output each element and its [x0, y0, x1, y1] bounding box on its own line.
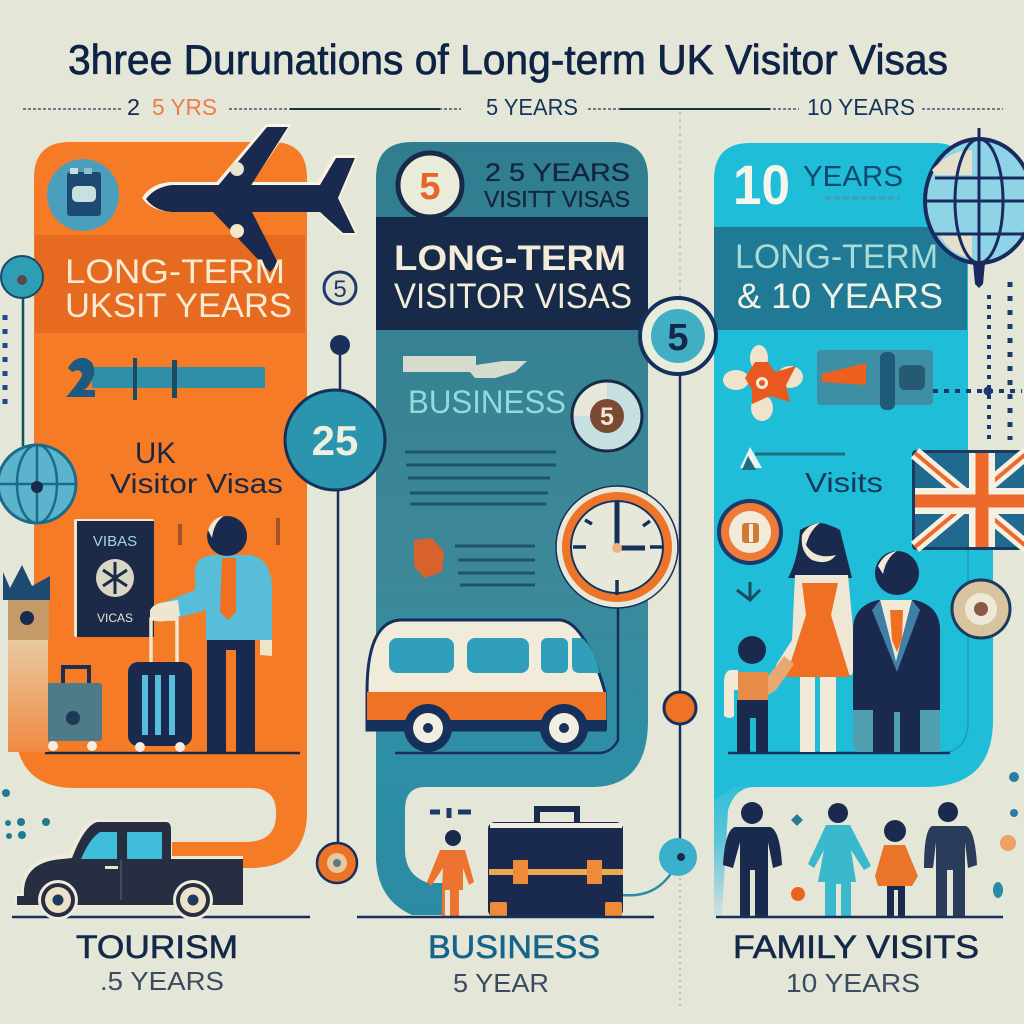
- icon: UK flag: [912, 450, 1024, 550]
- connector with node: [623, 838, 697, 895]
- icon: visitors group: [723, 802, 977, 917]
- teal panel and connector: [376, 142, 648, 915]
- icon: number 5 badge: [398, 153, 462, 217]
- panel inner outline and base line: [730, 550, 968, 753]
- father: [853, 600, 940, 710]
- cyan panel and connector: [714, 143, 993, 800]
- subheading: 2 5 YEARS: [485, 159, 630, 187]
- icon: number 5 badge: 5: [419, 166, 441, 208]
- dotted connector lines: [933, 282, 1022, 440]
- bottom base lines: [12, 916, 1003, 918]
- heading 10 years: YEARS: [803, 161, 903, 193]
- right decorative marks: [791, 772, 1019, 901]
- heading text: LONG-TERM: [735, 238, 938, 276]
- caption: business: BUSINESS: [428, 929, 600, 965]
- icon: passport: VIBAS: [93, 533, 137, 550]
- heading text: & 10 YEARS: [737, 277, 943, 316]
- timeline header: 5 YEARS: [486, 94, 578, 120]
- panel: family visits: [714, 128, 1024, 917]
- left decorative dots: [2, 789, 50, 839]
- text: UK visitor visas: Visitor Visas: [110, 468, 283, 499]
- panel: business: [367, 142, 697, 917]
- caption: business: 5 YEAR: [453, 968, 549, 998]
- caption: tourism: TOURISM: [76, 929, 238, 965]
- small marks above person: [430, 808, 471, 818]
- panel base line: [395, 606, 618, 753]
- heading text: [735, 238, 943, 316]
- caption: business: [428, 929, 600, 998]
- timeline header: [23, 94, 1003, 120]
- caption: family visits: 10 YEARS: [786, 968, 920, 998]
- base line: [728, 752, 950, 754]
- caption: family visits: [733, 929, 979, 998]
- icon: briefcase: [488, 809, 623, 917]
- icon: small 5 node: 5: [333, 276, 347, 303]
- heading 10 years: [733, 153, 903, 216]
- icon: passport: [74, 519, 154, 637]
- icon: down arrow: [737, 582, 760, 601]
- heading text: LONG-TERM: [65, 253, 285, 291]
- timeline orange node: [664, 692, 696, 724]
- icon: camera: [817, 350, 933, 410]
- icon: passport: VICAS: [97, 611, 133, 625]
- caption: tourism: .5 YEARS: [100, 966, 224, 996]
- heading band: [714, 227, 967, 330]
- left side node: teal: [1, 256, 43, 446]
- icon: castle tower: [3, 565, 50, 752]
- timeline header: 10 YEARS: [807, 94, 915, 120]
- panel: tourism: [3, 124, 358, 868]
- icon: 5 node: 5: [667, 317, 689, 359]
- icon: side badge: [952, 580, 1010, 638]
- mother: [788, 524, 852, 578]
- subheading: VISITT VISAS: [484, 186, 630, 212]
- heading text: LONG-TERM: [394, 239, 626, 278]
- tourism orange node: [317, 843, 357, 883]
- child: [738, 636, 766, 664]
- icon: small 5 badge: [572, 381, 642, 451]
- icon: globe: [925, 128, 1024, 288]
- timeline header: 5 YRS: [152, 94, 217, 120]
- icon: small businessperson: [427, 830, 474, 916]
- small decorative marks: [180, 518, 278, 545]
- heading text: VISITOR VISAS: [394, 277, 632, 316]
- icon: clock: [556, 486, 678, 608]
- icon: plane wing: [403, 356, 527, 378]
- column divider lines: [338, 112, 680, 1010]
- title: 3hree Durunations of Long-term UK Visitor Visas: [68, 36, 948, 83]
- icon: traveller: [150, 516, 272, 752]
- timeline header: 2: [127, 94, 140, 120]
- subheading: [484, 159, 630, 212]
- icon: small 5 badge: 5: [600, 403, 614, 431]
- icon: family group: [724, 523, 940, 752]
- icon: ribbon: [66, 358, 265, 400]
- cyan lower column: [714, 760, 790, 915]
- icon: large 25 node: 25: [312, 417, 358, 464]
- business label: BUSINESS: [408, 384, 566, 420]
- icon: blue suitcase: [128, 619, 192, 752]
- icon: flame seal: [414, 538, 444, 578]
- icon: 5 node: [640, 298, 716, 374]
- icon: large 25 node: [285, 390, 385, 490]
- heading 10 years: 10: [733, 153, 790, 216]
- icon: badge: [47, 159, 119, 231]
- icon: small marker and bar: [740, 447, 845, 470]
- document lines: [405, 452, 556, 585]
- text: UK visitor visas: UK: [135, 437, 176, 470]
- caption: family visits: FAMILY VISITS: [733, 929, 979, 965]
- orange panel and connector: [15, 142, 307, 868]
- icon: flower: [723, 345, 803, 421]
- heading band: [376, 217, 648, 330]
- timeline dot: [330, 335, 350, 355]
- text: UK visitor visas: [110, 437, 283, 499]
- visits label: Visits: [805, 467, 883, 498]
- icon: round badge: [717, 499, 783, 565]
- panel: tourism: UKSIT YEARS: [65, 287, 292, 325]
- panel base line: [45, 752, 300, 754]
- icon: bus: [367, 620, 607, 752]
- caption: tourism: [76, 929, 238, 996]
- heading text: [394, 239, 632, 316]
- icon: airplane: [142, 124, 358, 272]
- heading band: [35, 235, 305, 333]
- icon: grey suitcase: [45, 667, 102, 751]
- icon: pickup truck: [15, 819, 243, 920]
- icon: left globe: [0, 445, 76, 523]
- icon: small 5 node: [324, 272, 356, 304]
